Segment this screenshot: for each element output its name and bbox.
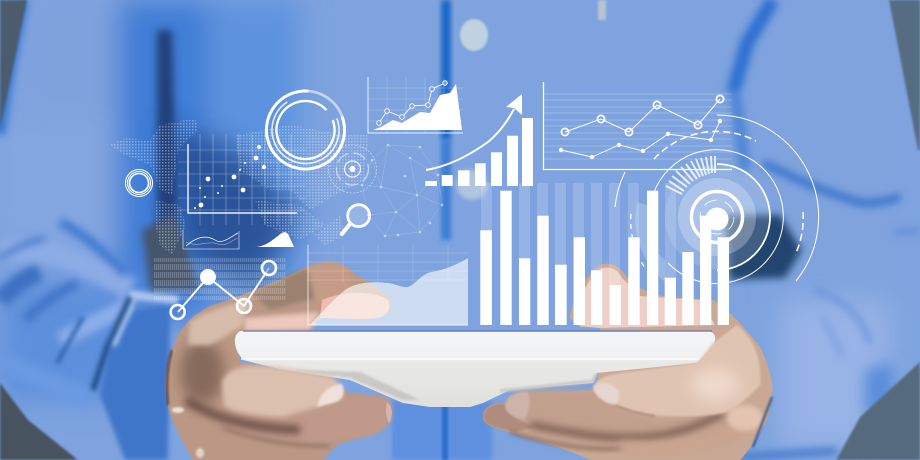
hologram: mini mountain chart <box>257 232 294 247</box>
hologram: small radar icon <box>328 145 376 193</box>
right hand <box>483 264 773 460</box>
hologram: mini line chart <box>183 230 239 249</box>
hologram: bottom-left line chart <box>171 261 276 319</box>
right thumb <box>593 325 760 416</box>
hologram: large radar target <box>615 115 819 284</box>
left thumbnail <box>317 384 343 407</box>
hologram: magnifier icon <box>342 205 370 234</box>
hologram: top area chart <box>368 77 463 133</box>
hologram: network globe <box>361 144 443 237</box>
hologram: dotted world map <box>110 118 368 255</box>
hologram: pale background bars <box>481 183 676 325</box>
hologram: large ring icon <box>256 80 355 180</box>
hologram: translucent area chart <box>308 245 468 325</box>
right sleeve folds <box>733 0 920 457</box>
tablet <box>235 331 715 407</box>
hologram: grid scatter chart <box>178 134 305 225</box>
hologram: rising small bars with arrow <box>425 94 533 186</box>
right hand shading <box>483 267 772 449</box>
growth arrow <box>426 94 522 170</box>
body shadow gap <box>165 125 300 290</box>
hologram: data strip <box>154 258 286 300</box>
right thumbnail <box>594 383 619 405</box>
hologram: main bar chart <box>480 191 729 325</box>
left hand <box>166 262 392 460</box>
left finger nail <box>386 402 392 423</box>
left sleeve folds <box>0 0 130 400</box>
hologram: top-right line chart <box>543 82 732 170</box>
left thumb <box>222 366 343 417</box>
shadow under radar <box>725 215 802 280</box>
hologram: small ring icon <box>126 170 152 196</box>
left hand shading <box>167 263 392 458</box>
shirt placket and buttons <box>441 0 451 140</box>
